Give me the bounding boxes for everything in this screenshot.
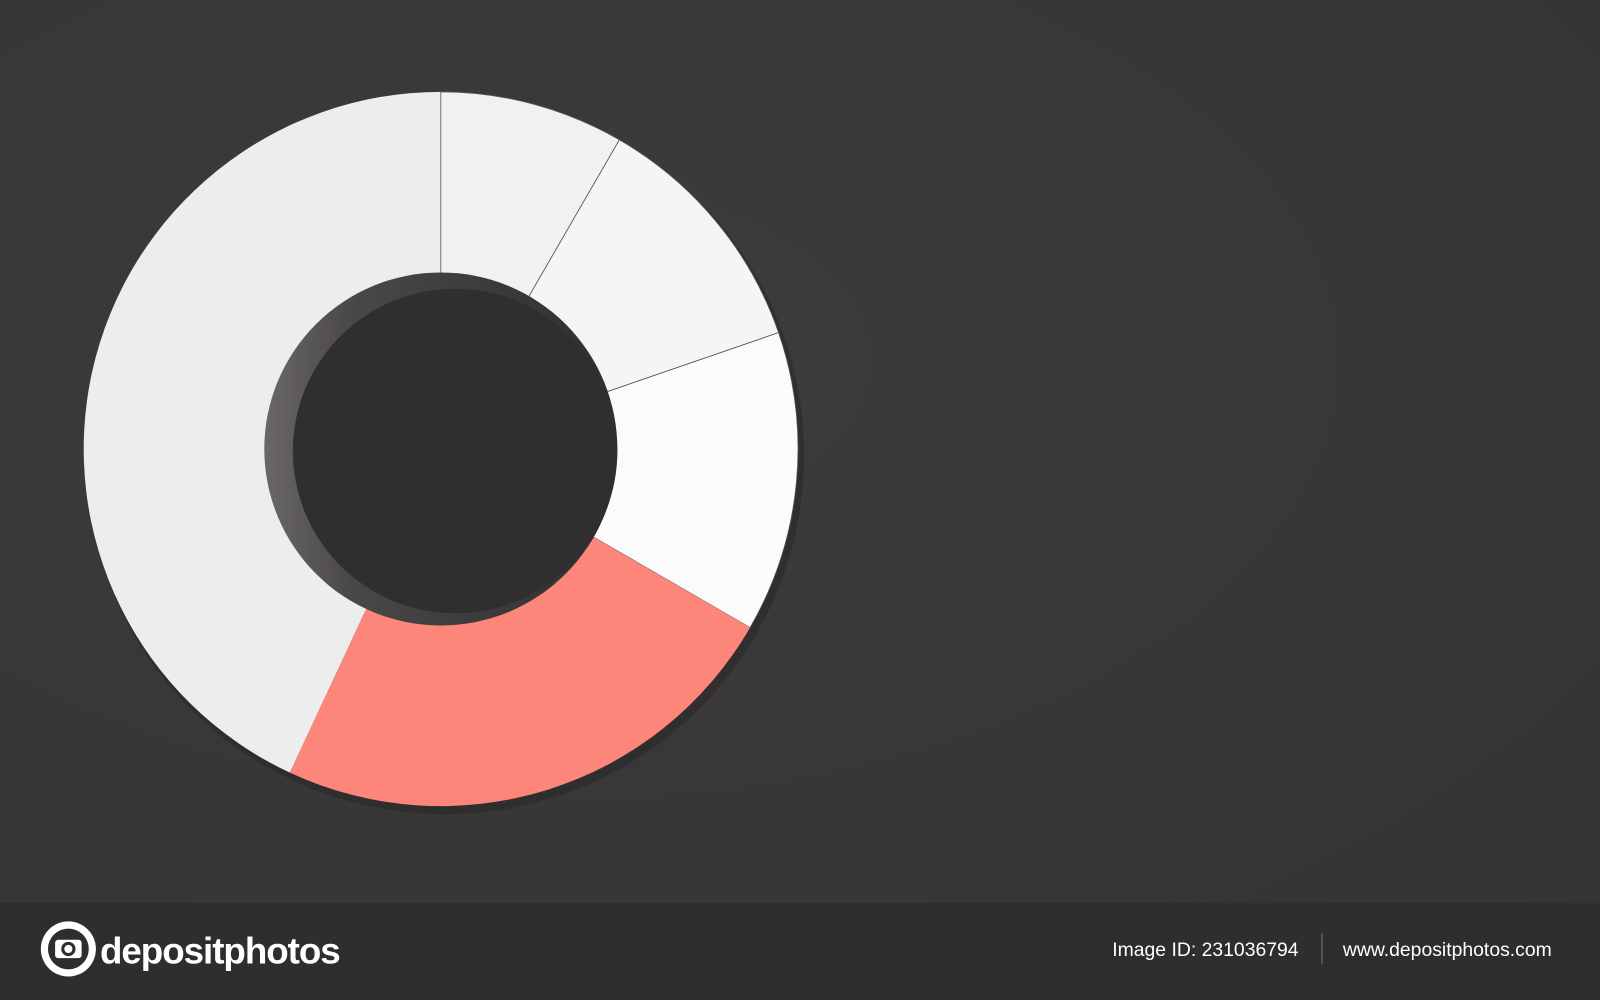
- segment: upper right: [522, 140, 779, 396]
- donut chart: [84, 92, 804, 814]
- website: www.depositphotos.com: [1342, 939, 1552, 961]
- segment: right: [582, 333, 798, 628]
- segment: coral highlight: [290, 531, 750, 806]
- donut hole: [264, 272, 617, 626]
- segment: large white: [84, 92, 441, 773]
- footer bar: [0, 903, 1600, 1000]
- logo text: depositphotos: [100, 930, 340, 971]
- segment: top: [441, 92, 619, 308]
- image id: Image ID: 231036794: [1112, 939, 1299, 961]
- logo icon: [41, 921, 96, 977]
